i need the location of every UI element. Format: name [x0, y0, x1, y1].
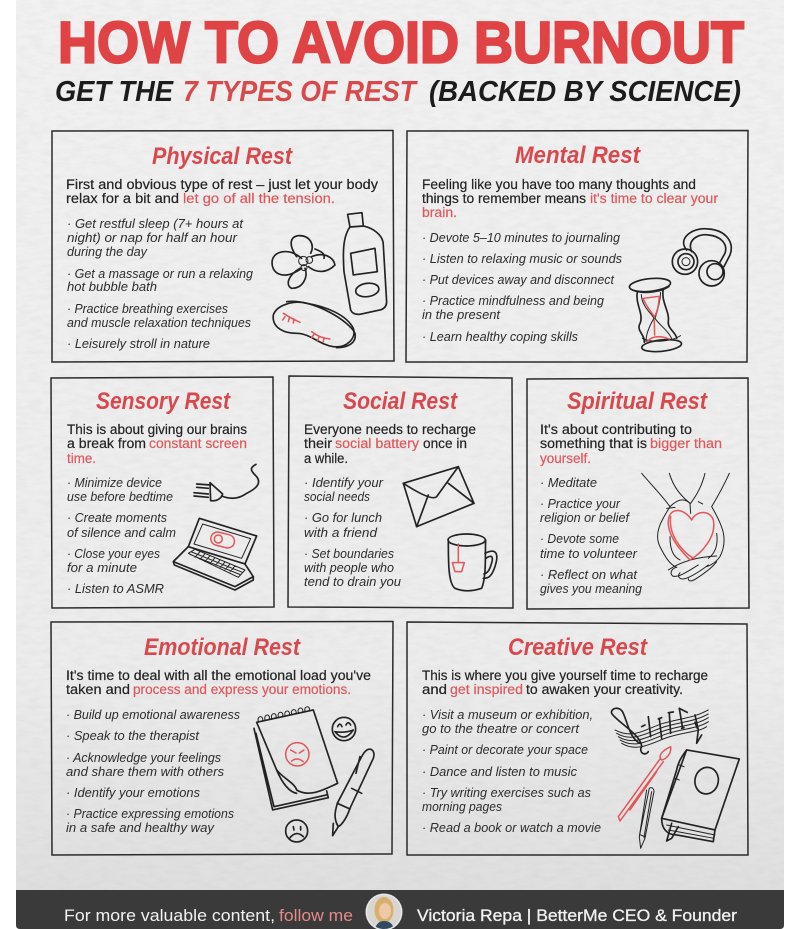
intro: creative rest: to awaken your creativity.	[526, 682, 683, 697]
bullets: social rest: · Set boundaries	[304, 546, 395, 561]
bullets: physical rest: · Get restful sleep (7+ hours at	[67, 216, 243, 231]
intro: social rest: a while.	[304, 451, 348, 466]
bullets: creative rest: · Read a book or watch a movie	[422, 820, 601, 835]
bullets: mental rest: · Listen to relaxing music or sounds	[422, 251, 623, 266]
intro: sensory rest: time.	[67, 451, 96, 466]
bullets: mental rest: · Devote 5–10 minutes to journaling	[422, 230, 620, 245]
subtitle: GET THE	[55, 76, 175, 108]
footer call to action: follow me	[279, 906, 353, 925]
bullets: physical rest: · Leisurely stroll in nature	[67, 336, 210, 351]
icon: notepad, pen and faces	[254, 707, 374, 842]
subtitle: 7 TYPES OF REST	[183, 76, 418, 108]
bullets: emotional rest: in a safe and healthy way	[66, 820, 216, 835]
bullets: emotional rest: · Practice expressing emotions	[66, 806, 235, 821]
footer bar	[16, 890, 784, 929]
bullets: spiritual rest: · Meditate	[540, 475, 597, 490]
bullets: social rest: · Go for lunch	[304, 510, 382, 525]
bullets: creative rest: morning pages	[422, 799, 503, 814]
bullets: creative rest: · Paint or decorate your space	[422, 742, 588, 757]
bullets: emotional rest: · Identify your emotions	[66, 785, 201, 800]
bullets: social rest: social needs	[304, 489, 371, 504]
heading: creative rest: Creative Rest	[508, 634, 648, 661]
bullets: mental rest: in the present	[422, 307, 500, 322]
intro: spiritual rest: yourself.	[540, 451, 591, 466]
heading: spiritual rest: Spiritual Rest	[567, 388, 708, 415]
bullets: physical rest: hot bubble bath	[67, 279, 157, 294]
bullets: sensory rest: use before bedtime	[67, 489, 173, 504]
bullets: spiritual rest: · Practice your	[540, 496, 621, 511]
intro: spiritual rest	[540, 422, 722, 466]
subtitle	[55, 76, 741, 108]
icon: music notes, brush, pencil and book	[611, 708, 739, 848]
intro: creative rest	[422, 668, 708, 697]
icon: hands holding heart	[642, 473, 729, 581]
bullets: sensory rest: of silence and calm	[67, 525, 176, 540]
bullets: social rest: with people who	[304, 560, 394, 575]
panel: physical rest	[52, 130, 394, 362]
subtitle: (BACKED BY SCIENCE)	[429, 76, 741, 108]
heading: mental rest: Mental Rest	[515, 142, 641, 169]
panel: sensory rest	[51, 377, 274, 608]
bullets: physical rest: · Practice breathing exercises	[67, 301, 229, 316]
intro: social rest	[304, 422, 476, 466]
bullets: physical rest: and muscle relaxation techniques	[67, 315, 252, 330]
bullets: physical rest: night) or nap for half an hour	[67, 230, 238, 245]
bullets: spiritual rest	[540, 475, 642, 596]
bullets: social rest: tend to drain you	[304, 574, 401, 589]
bullets: mental rest: · Learn healthy coping skills	[422, 329, 579, 344]
bullets: creative rest	[422, 707, 601, 835]
intro: social rest: their	[304, 436, 333, 451]
bullets: sensory rest: · Minimize device	[67, 475, 162, 490]
bullets: physical rest: · Get a massage or run a relaxing	[67, 266, 253, 281]
bullets: physical rest	[67, 216, 253, 351]
intro: creative rest: get inspired	[450, 682, 523, 697]
bullets: spiritual rest: gives you meaning	[540, 581, 642, 596]
panel: spiritual rest	[527, 378, 749, 609]
bullets: spiritual rest: · Devote some	[540, 531, 619, 546]
icon: headphones and hourglass	[629, 229, 731, 353]
bullets: mental rest: · Practice mindfulness and being	[422, 293, 604, 308]
bullets: emotional rest: · Build up emotional awareness	[66, 707, 241, 722]
bullets: sensory rest: · Create moments	[67, 510, 168, 525]
icon: plug and laptop	[173, 464, 259, 590]
intro: mental rest: brain.	[422, 205, 457, 220]
bullets: emotional rest: and share them with others	[66, 764, 225, 779]
intro: sensory rest: constant screen	[149, 436, 247, 451]
intro: emotional rest: taken and	[66, 682, 130, 697]
bullets: creative rest: · Try writing exercises such as	[422, 785, 592, 800]
panel: creative rest	[407, 622, 748, 855]
footer author: Victoria Repa | BetterMe CEO & Founder	[417, 906, 737, 925]
bullets: spiritual rest: time to volunteer	[540, 546, 638, 561]
bullets: physical rest: during the day	[67, 244, 149, 259]
bullets: creative rest: · Visit a museum or exhibition,	[422, 707, 593, 722]
bullets: sensory rest: for a minute	[67, 560, 137, 575]
intro: physical rest: let go of all the tension.	[183, 191, 335, 206]
heading: physical rest: Physical Rest	[152, 143, 293, 170]
intro: spiritual rest: bigger than	[650, 436, 722, 451]
panel: mental rest	[406, 130, 748, 362]
intro: emotional rest: It's time to deal with all the emotional load you've	[66, 668, 371, 683]
bullets: emotional rest: · Speak to the therapist	[66, 728, 199, 743]
bullets: sensory rest: · Listen to ASMR	[67, 581, 164, 596]
intro: social rest: social battery	[335, 436, 419, 451]
bullets: social rest: with a friend	[304, 525, 378, 540]
footer call to action: For more valuable content,	[64, 906, 275, 925]
title: HOW TO AVOID BURNOUT	[58, 10, 744, 76]
bullets: mental rest	[422, 230, 623, 344]
bullets: sensory rest	[67, 475, 176, 596]
heading: social rest: Social Rest	[343, 388, 458, 415]
intro: creative rest: This is where you give yourself time to recharge	[422, 668, 708, 683]
bullets: social rest: · Identify your	[304, 475, 384, 490]
intro: mental rest	[422, 177, 719, 220]
bullets: spiritual rest: religion or belief	[540, 510, 630, 525]
intro: spiritual rest: It's about contributing to	[540, 422, 692, 437]
bullets: emotional rest: · Acknowledge your feelings	[66, 750, 222, 765]
panel: emotional rest	[51, 622, 393, 855]
bullets: creative rest: · Dance and listen to music	[422, 764, 578, 779]
intro: social rest: once in	[423, 436, 467, 451]
intro: physical rest: First and obvious type of rest – just let your body	[66, 177, 378, 192]
intro: mental rest: things to remember means	[422, 191, 586, 206]
intro: creative rest: and	[422, 682, 447, 697]
intro: spiritual rest: something that is	[540, 436, 647, 451]
intro: sensory rest: This is about giving our brains	[67, 422, 247, 437]
icon: envelope and mug	[403, 467, 497, 591]
bullets: spiritual rest: · Reflect on what	[540, 567, 637, 582]
intro: mental rest: it's time to clear your	[590, 191, 719, 206]
bullets: mental rest: · Put devices away and disconnect	[422, 272, 614, 287]
bullets: creative rest: go to the theatre or concert	[422, 721, 579, 736]
intro: social rest: Everyone needs to recharge	[304, 422, 476, 437]
intro: emotional rest: process and express your emotions.	[133, 682, 351, 697]
bullets: emotional rest	[66, 707, 241, 835]
footer call to action	[64, 906, 353, 925]
intro: mental rest: Feeling like you have too many thoughts and	[422, 177, 696, 192]
bullets: social rest	[304, 475, 401, 589]
heading: sensory rest: Sensory Rest	[96, 388, 231, 415]
avatar: portrait	[366, 894, 402, 929]
intro: emotional rest	[66, 668, 371, 697]
icon: orchid, bottle and sleep mask	[272, 213, 387, 348]
intro: sensory rest	[67, 422, 247, 466]
panel: social rest	[288, 376, 513, 608]
bullets: sensory rest: · Close your eyes	[67, 546, 161, 561]
intro: sensory rest: a break from	[67, 436, 146, 451]
heading: emotional rest: Emotional Rest	[144, 634, 301, 661]
intro: physical rest: relax for a bit and	[66, 191, 179, 206]
intro: physical rest	[66, 177, 378, 206]
